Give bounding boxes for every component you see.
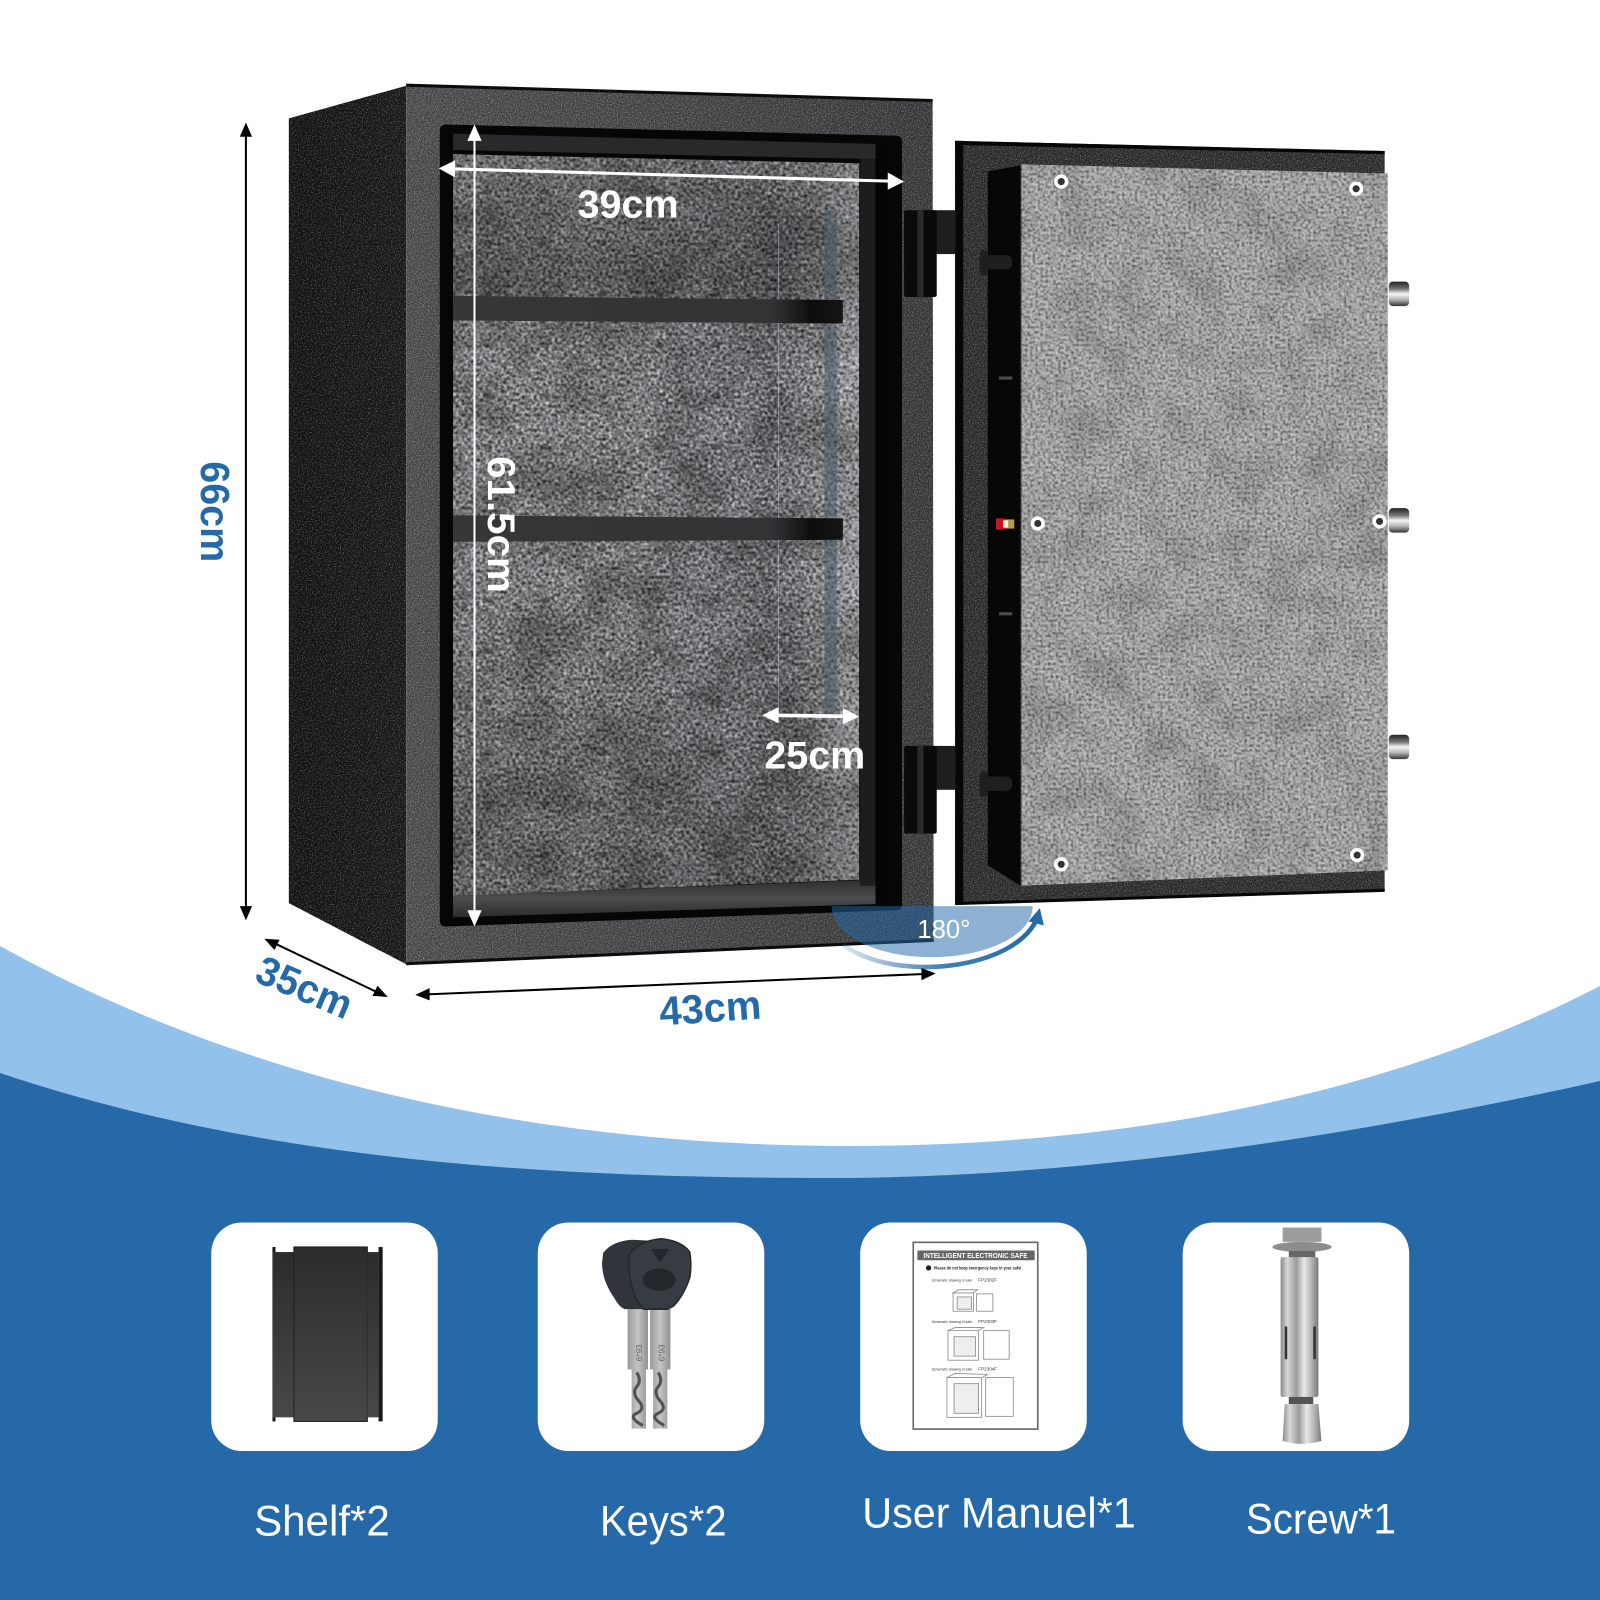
hinges [904,210,955,834]
felt interior shading [453,154,859,896]
dimension: 35cm depth: 35cm [250,947,360,1028]
light blue wave [0,946,1600,1300]
dark blue lower panel [0,1073,1600,1600]
safe body [289,84,934,965]
icon: two keys [602,1239,691,1429]
felt stitched dots [453,154,760,896]
manual document [913,1242,1038,1429]
door plate [955,141,1385,904]
manual header bar [917,1251,1035,1260]
accessory: keys [538,1222,764,1546]
felt door lining [1021,164,1388,886]
dimension: 66cm height: 66cm [192,461,238,562]
reset button [996,518,1014,530]
top edge highlight [406,84,933,102]
top door edge [955,141,1385,154]
safe and dimensions illustration [192,84,1409,1546]
model FP2304F: Schematic drawing of safe FP2304F [932,1366,997,1371]
icon: expansion screw [1272,1228,1332,1444]
accessory: shelf [211,1222,438,1546]
dimension: 39cm interior width [439,160,904,226]
open door [955,141,1409,905]
key logo [643,1268,676,1291]
blades: 6*93 [635,1344,644,1361]
dimension: 66cm height [192,122,252,920]
mini safe drawing 2 [948,1328,1009,1360]
dimension: 39cm interior width: 39cm [578,183,679,226]
manual warning: Please do not keep emergency keys in your safe! [934,1265,1021,1270]
screw card [1183,1222,1409,1451]
blades: 6*93 [657,1344,666,1361]
mounting screws [1031,174,1387,871]
top inner band [453,134,876,159]
flange [1272,1242,1332,1252]
bottom edge [406,939,934,965]
small fittings [999,377,1012,615]
glass rail strip [824,209,837,714]
front frame [406,86,934,964]
neck [1289,1251,1315,1259]
shelf label: Shelf*2 [254,1498,390,1546]
warning bullet [926,1265,931,1271]
swing arc arrow [843,921,1036,967]
accessory: user manual [860,1222,1136,1538]
back key head [602,1240,653,1309]
model FP2303F: Schematic drawing of safe FP2303F [932,1319,997,1324]
right felt edge line [876,143,884,903]
upper shelf [453,296,843,323]
model FP2302F: Schematic drawing of safe FP2302F [932,1278,997,1283]
mini safe drawing 3 [947,1373,1013,1417]
keys card [538,1222,764,1451]
dimension: 61.5cm interior height: 61.5cm [479,456,522,593]
lower shelf [453,515,843,542]
bottom door edge [955,889,1385,905]
shelf card [211,1222,438,1451]
inner dark block [988,165,1020,886]
sleeve slots [1285,1327,1316,1359]
arc arrowhead [1029,908,1044,926]
left dark strip [955,141,963,904]
shelf icon [272,1247,383,1421]
dimension: 25cm interior depth [762,707,865,777]
keys label: Keys*2 [600,1498,727,1546]
label: 180 degrees: 180° [917,916,970,944]
collar [1289,1397,1313,1404]
dimension: 61.5cm interior height [467,124,522,927]
front key head [629,1239,691,1309]
180 degree door swing marker [832,906,1044,967]
key ring triangle [651,1249,669,1262]
right inner band [860,159,876,886]
cone [1283,1404,1321,1444]
swing ellipse [832,906,1033,957]
sleeve [1281,1257,1318,1397]
bolt head [1283,1228,1321,1242]
locking bolts [1389,282,1409,759]
manual title: INTELLIGENT ELECTRONIC SAFE [923,1252,1028,1260]
top hinge [904,210,955,297]
glass reflection line [778,224,780,714]
bottom hinge [904,746,955,834]
black door opening [440,124,902,927]
mini safe drawing 1 [953,1290,993,1311]
manual label: User Manuel*1 [862,1490,1136,1538]
side panel [289,86,406,964]
dimension: 43cm width [415,968,936,1034]
door pegs [980,250,1012,797]
dimension: 43cm width: 43cm [658,981,763,1034]
blades [628,1309,670,1429]
dimension: 25cm interior depth: 25cm [764,734,865,777]
screw label: Screw*1 [1246,1496,1396,1544]
bottom inner band [453,880,876,917]
manual card [860,1222,1087,1451]
accessory: screw [1183,1222,1409,1544]
felt interior [453,154,859,896]
